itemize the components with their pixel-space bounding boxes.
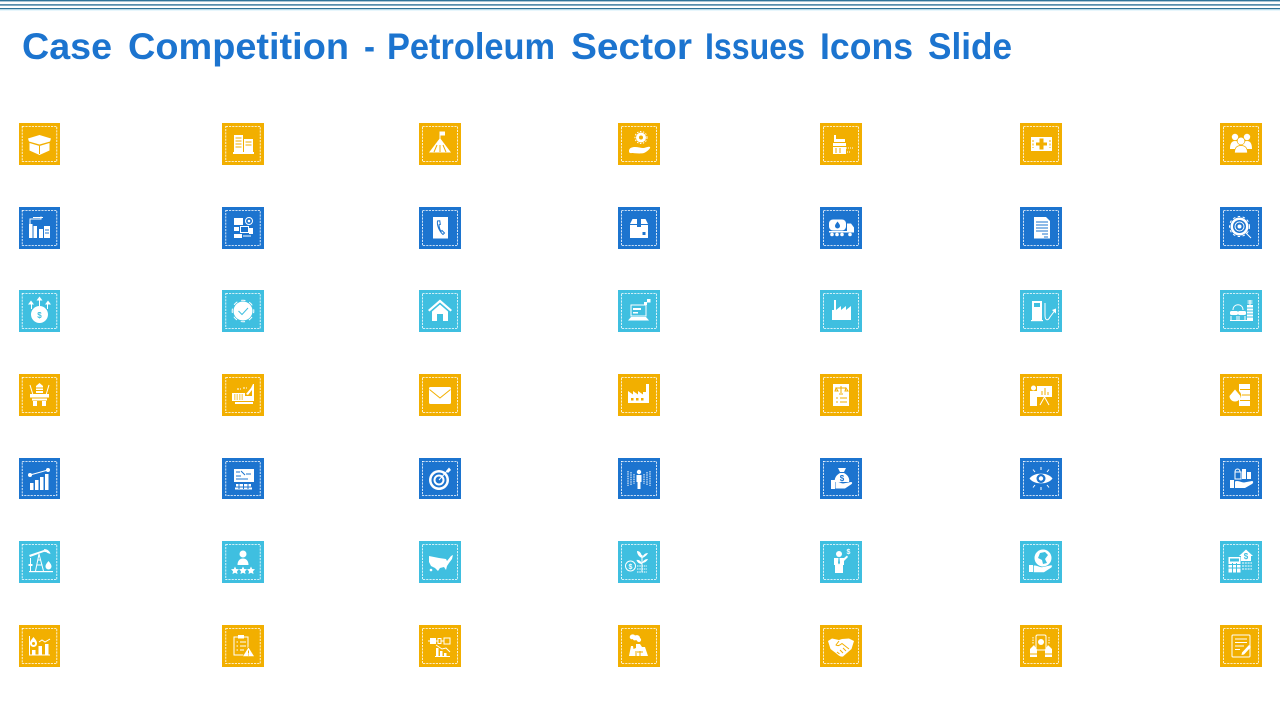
icon: hand holding gear xyxy=(618,123,660,165)
icon: tanker truck xyxy=(820,207,862,249)
icon: pipeline decline xyxy=(419,625,461,667)
icon: calculator and house xyxy=(1220,541,1262,583)
icon: factory plan xyxy=(820,123,862,165)
icon: legal document xyxy=(820,374,862,416)
title: Case xyxy=(22,26,112,67)
icon: refinery xyxy=(19,207,60,249)
icon: growth chart xyxy=(19,458,60,499)
title: Icons xyxy=(820,26,913,67)
icon: hand with plant xyxy=(1220,458,1262,499)
title: Petroleum xyxy=(387,26,555,67)
title: Competition xyxy=(128,26,349,67)
icon: envelope xyxy=(419,374,461,416)
icon: eye with rays xyxy=(1020,458,1062,499)
icon: oil drop chart xyxy=(19,625,60,667)
icon: document gears xyxy=(222,207,264,249)
icon: phone book xyxy=(419,207,461,249)
icon: open box xyxy=(19,123,60,165)
title: Sector xyxy=(571,26,692,67)
icon: mountain flag xyxy=(419,123,461,165)
icon: clipboard warning xyxy=(222,625,264,667)
icon: handshake xyxy=(820,625,862,667)
icon: money bag arrows: $ xyxy=(37,311,42,320)
icon: gear search xyxy=(1220,207,1262,249)
icon: office buildings xyxy=(222,123,264,165)
icon: money bag in hand xyxy=(820,458,862,499)
icon: presentation board xyxy=(222,458,264,499)
icon: plant and coin: $ xyxy=(629,564,633,571)
icon: oil rig xyxy=(19,374,60,416)
icon: target arrow xyxy=(419,458,461,499)
icon: document with pen xyxy=(1220,625,1262,667)
icon: factory xyxy=(618,374,660,416)
icon: factory silhouette xyxy=(820,290,862,332)
icon: hands with phone xyxy=(1020,625,1062,667)
title: - xyxy=(364,26,375,67)
title: Slide xyxy=(928,26,1012,67)
icon: barrel and drop xyxy=(1220,374,1262,416)
icon: house xyxy=(419,290,461,332)
icon: laptop growth xyxy=(618,290,660,332)
title: Issues xyxy=(705,26,805,67)
icon: person data wings xyxy=(618,458,660,499)
title xyxy=(22,26,1012,67)
icon: calculator and house: $ xyxy=(1244,552,1249,561)
icon: gear check xyxy=(222,290,264,332)
icon: people group xyxy=(1220,123,1262,165)
icon: money bag in hand: $ xyxy=(840,474,845,483)
icon: smoking factory xyxy=(618,625,660,667)
icon: package xyxy=(618,207,660,249)
icon: presenter board xyxy=(1020,374,1062,416)
icon: person rating stars xyxy=(222,541,264,583)
icon: globe in hand xyxy=(1020,541,1062,583)
icon: oil tanks xyxy=(1220,290,1262,332)
icon: pumpjack xyxy=(19,541,60,583)
icon: businessman with dollar xyxy=(820,541,862,583)
icon: excavator report xyxy=(222,374,264,416)
icon: money bag arrows xyxy=(19,290,60,332)
icon: fuel pump rising xyxy=(1020,290,1062,332)
icon: plant and coin xyxy=(618,541,660,583)
icon: puzzle plus xyxy=(1020,123,1062,165)
icon: businessman with dollar: $ xyxy=(847,549,851,556)
icon: document xyxy=(1020,207,1062,249)
icon: USA map xyxy=(419,541,461,583)
